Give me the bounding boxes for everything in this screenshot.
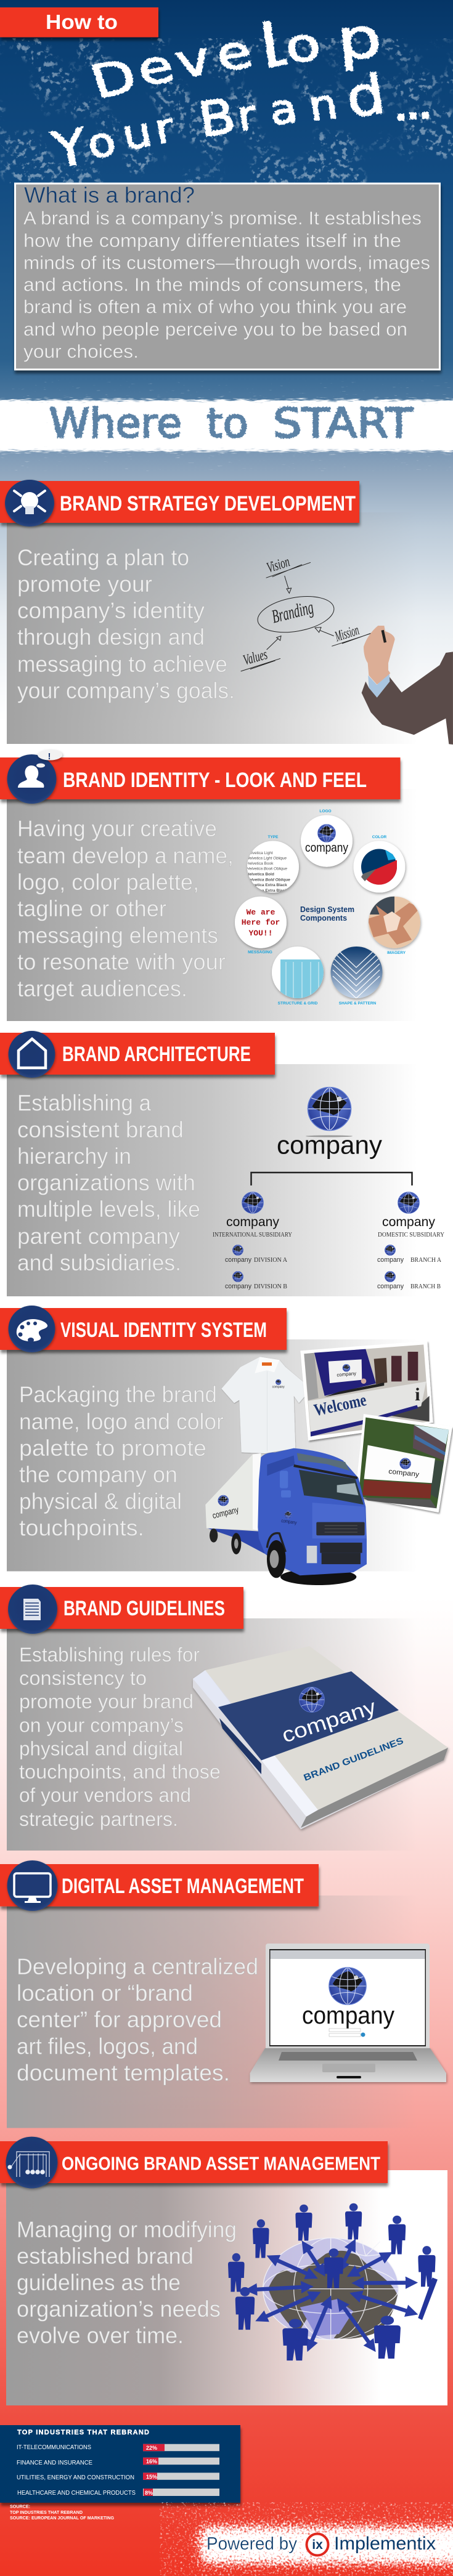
source note xyxy=(10,2505,115,2521)
text: guidelines description: physical and digital xyxy=(19,1738,183,1760)
circle: messaging: YOU!! xyxy=(248,929,273,938)
row: finance and insurance: FINANCE AND INSURANCE xyxy=(17,2460,92,2466)
text: brand definition: and actions. In the minds of consumers, the xyxy=(23,274,401,296)
circle: type: Helvetica Light xyxy=(247,851,273,855)
sketch: branding diagram: Branding xyxy=(269,597,316,627)
text: architecture description: parent company xyxy=(17,1224,180,1249)
banner: where to start xyxy=(0,400,453,451)
heading bar: BRAND ARCHITECTURE xyxy=(62,1043,251,1066)
panel: brand architecture xyxy=(0,1031,453,1296)
footer: powered by implementix xyxy=(206,2534,436,2556)
heading bar: BRAND IDENTITY - LOOK AND FEEL xyxy=(63,769,367,792)
text: architecture description: organizations with xyxy=(17,1170,195,1195)
label: design system components: Design System xyxy=(300,905,354,914)
source note: SOURCE: xyxy=(10,2505,30,2509)
illustration: people around a globe xyxy=(228,2203,438,2360)
text: identity description: target audiences. xyxy=(17,976,187,1001)
text: architecture description: Establishing a xyxy=(17,1090,151,1116)
domestic subsidiary xyxy=(378,1192,444,1238)
sketch: branding diagram: Vision xyxy=(265,554,292,576)
photo: company sign xyxy=(355,1414,452,1512)
circle: messaging: We are xyxy=(247,908,275,917)
panel: digital asset management xyxy=(0,1860,453,2128)
text: architecture description: multiple levels, like xyxy=(17,1197,200,1222)
title: Develop Your Brand: D xyxy=(84,49,143,109)
illustration: shirt xyxy=(221,1357,311,1453)
heading bar xyxy=(0,481,359,523)
text: ongoing description: evolve over time. xyxy=(17,2323,184,2348)
circle: messaging xyxy=(235,897,287,955)
circle: type: Helvetica Book xyxy=(247,862,274,866)
circle: type: Helvetica Bold xyxy=(247,873,274,877)
icon: palette xyxy=(9,1306,55,1352)
text: digital asset description: document templates. xyxy=(17,2061,230,2086)
heading bar xyxy=(0,1864,319,1907)
banner: where to start: Where xyxy=(49,400,182,447)
domestic subsidiary: DOMESTIC SUBSIDIARY xyxy=(378,1231,444,1238)
panel: brand identity xyxy=(0,750,453,1021)
connector xyxy=(251,1173,412,1185)
illustration: shirt: company xyxy=(272,1385,285,1389)
icon: lightbulb xyxy=(5,480,54,527)
text: architecture description xyxy=(17,1090,200,1275)
icon: person with thought bubble: ! xyxy=(48,751,51,762)
text: strategy description: messaging to achieve xyxy=(17,652,227,677)
footer: powered by implementix: Implementix xyxy=(334,2534,436,2554)
branches: company xyxy=(377,1283,404,1290)
text: visual identity description: touchpoints. xyxy=(19,1515,144,1541)
title: Develop Your Brand: Y xyxy=(47,117,92,179)
text: visual identity description: palette to promote xyxy=(19,1435,206,1461)
row: utilities energy and construction: 15% xyxy=(146,2474,157,2480)
text: digital asset description: location or “brand xyxy=(17,1980,193,2006)
icon: monitor xyxy=(7,1860,58,1911)
heading bar xyxy=(0,1033,275,1075)
icon: person with thought bubble xyxy=(7,750,62,804)
circle: structure and grid xyxy=(272,947,324,1006)
circle: messaging: Here for xyxy=(242,918,280,927)
branches: BRANCH B xyxy=(410,1283,441,1290)
illustration: guidelines book: company xyxy=(279,1695,379,1748)
text: digital asset description: Developing a centralized xyxy=(17,1954,258,1979)
sketch: branding diagram xyxy=(241,554,381,671)
circle: logo: LOGO xyxy=(319,809,332,814)
row: utilities energy and construction xyxy=(17,2473,219,2481)
circle: color: COLOR xyxy=(372,835,387,839)
diagram: design system components xyxy=(235,809,420,1006)
logo: ix mark xyxy=(307,2534,328,2556)
text: brand definition: and who people perceive you to be based on xyxy=(23,318,407,340)
heading bar xyxy=(0,757,401,799)
panel: visual identity system xyxy=(0,1306,453,1585)
row: finance and insurance: 16% xyxy=(146,2458,157,2465)
text: architecture description: and subsidiaries. xyxy=(17,1250,181,1275)
text: digital asset description: art files, logos, and xyxy=(17,2033,198,2059)
text: strategy description: Creating a plan to xyxy=(17,545,189,570)
heading bar: BRAND GUIDELINES xyxy=(63,1597,225,1620)
branches xyxy=(377,1245,441,1290)
banner: where to start: START xyxy=(273,400,414,447)
title: Develop Your Brand: our xyxy=(83,104,178,169)
illustration: hand and sleeve xyxy=(362,626,453,745)
title: Develop Your Brand: o xyxy=(281,17,325,73)
icon: newton's cradle xyxy=(6,2137,58,2189)
illustration: truck xyxy=(205,1448,367,1585)
heading bar: DIGITAL ASSET MANAGEMENT xyxy=(62,1875,304,1898)
sketch: branding diagram: Values xyxy=(242,647,269,669)
panel: brand guidelines xyxy=(0,1585,453,1851)
circle: type: Helvetica Extra Black xyxy=(247,889,287,893)
heading bar: ONGOING BRAND ASSET MANAGEMENT xyxy=(62,2153,380,2174)
text: guidelines description: on your company’s xyxy=(19,1714,184,1737)
footer: powered by implementix: Powered by xyxy=(206,2534,297,2554)
row: it telecommunications xyxy=(17,2444,219,2451)
text: visual identity description xyxy=(19,1382,224,1541)
org chart xyxy=(213,1088,444,1290)
header tag: How to xyxy=(0,7,158,37)
text: visual identity description: physical & digital xyxy=(19,1489,182,1514)
heading bar: BRAND STRATEGY DEVELOPMENT xyxy=(60,492,356,515)
panel: brand strategy development xyxy=(0,480,453,745)
row: healthcare and chemical products xyxy=(17,2489,219,2497)
icon: house xyxy=(9,1031,55,1078)
circle: messaging: MESSAGING xyxy=(248,950,272,955)
circle: type: Helvetica Bold Oblique xyxy=(247,878,290,882)
photo: welcome desk: company xyxy=(337,1371,356,1378)
branches: company xyxy=(377,1256,404,1264)
heading bar xyxy=(0,2141,388,2183)
text: ongoing description: established brand xyxy=(17,2243,194,2269)
chalk smudges xyxy=(0,38,453,184)
text: ongoing description xyxy=(17,2217,237,2348)
title: Develop Your Brand: ... xyxy=(393,75,434,132)
text: ongoing description: organization’s needs xyxy=(17,2296,221,2322)
text: guidelines description: strategic partners. xyxy=(19,1808,178,1830)
photo: company sign: company xyxy=(388,1468,420,1479)
divisions: company xyxy=(225,1256,251,1264)
text: brand definition: A brand is a company’s promise. It establishes xyxy=(23,207,422,229)
photo: welcome desk: Welcome xyxy=(312,1391,368,1420)
illustration: truck: company xyxy=(211,1504,240,1520)
photo: welcome desk xyxy=(300,1341,433,1440)
text: strategy description xyxy=(17,545,235,703)
text: brand definition: brand is often a mix of who you think you are xyxy=(23,296,407,318)
circle: type: Helvetica Book Oblique xyxy=(247,867,287,871)
icon: document xyxy=(8,1585,57,1634)
illustration: laptop xyxy=(250,1944,446,2082)
text: identity description: Having your creative xyxy=(17,816,217,841)
row: healthcare and chemical products: 8% xyxy=(145,2490,153,2496)
text: brand definition: how the company differentiates itself in the xyxy=(23,230,401,251)
text: strategy description: your company’s goals. xyxy=(17,678,235,703)
sketch: branding diagram: Mission xyxy=(333,622,361,645)
illustration: truck: company xyxy=(281,1518,297,1525)
heading bar: VISUAL IDENTITY SYSTEM xyxy=(60,1318,267,1342)
heading bar xyxy=(0,1587,243,1629)
text: ongoing description: guidelines as the xyxy=(17,2270,181,2295)
parent company logo: company xyxy=(277,1131,382,1159)
heading bar xyxy=(0,1308,287,1350)
text: guidelines description: consistency to xyxy=(19,1667,147,1689)
circle: type: TYPE xyxy=(268,835,279,839)
international subsidiary xyxy=(213,1192,292,1238)
circle: imagery xyxy=(367,896,420,955)
text: brand definition: minds of its customers—through words, images xyxy=(23,252,430,273)
divisions: company xyxy=(225,1283,251,1290)
text: guidelines description xyxy=(19,1644,221,1830)
text: identity description: messaging elements xyxy=(17,923,218,948)
text: identity description: team develop a name, xyxy=(17,843,234,868)
heading: what is a brand: What is a brand? xyxy=(24,182,195,208)
text: visual identity description: Packaging the brand xyxy=(19,1382,217,1407)
label: design system components xyxy=(300,905,354,923)
text: guidelines description: of your vendors and xyxy=(19,1784,191,1806)
title: Develop Your Brand: B xyxy=(195,89,239,148)
international subsidiary: INTERNATIONAL SUBSIDIARY xyxy=(213,1231,292,1238)
domestic subsidiary: company xyxy=(382,1215,435,1229)
text: identity description: to resonate with your xyxy=(17,950,226,975)
title: Develop Your Brand: eve xyxy=(130,24,258,97)
text: guidelines description: promote your brand xyxy=(19,1690,194,1713)
title: Develop Your Brand xyxy=(47,6,434,179)
row: it telecommunications: IT-TELECOMMUNICATIONS xyxy=(17,2444,91,2451)
panel: what is a brand xyxy=(15,182,440,369)
text: ongoing description: Managing or modifying xyxy=(17,2217,237,2242)
title: Develop Your Brand: d xyxy=(342,62,390,130)
title: Develop Your Brand: ran xyxy=(234,81,341,140)
title: Develop Your Brand: p xyxy=(335,6,384,73)
parent company logo xyxy=(277,1088,382,1159)
text: guidelines description: Establishing rules for xyxy=(19,1644,200,1666)
branches: BRANCH A xyxy=(410,1256,441,1264)
banner: where to start: to xyxy=(206,400,248,447)
row: finance and insurance xyxy=(17,2458,219,2466)
photo: welcome desk: i xyxy=(415,1384,420,1405)
illustration: guidelines book xyxy=(193,1646,448,1829)
label: design system components: Components xyxy=(300,914,347,923)
illustration: guidelines book: BRAND GUIDELINES xyxy=(302,1735,405,1783)
divisions: DIVISION B xyxy=(254,1283,287,1290)
divisions: DIVISION A xyxy=(254,1256,287,1264)
circle: type: Helvetica Light Oblique xyxy=(247,856,287,861)
circle: type: Helvetica Extra Black xyxy=(247,883,287,887)
text: identity description: tagline or other xyxy=(17,896,166,921)
text: brand definition xyxy=(23,207,430,362)
circle: logo: company xyxy=(305,841,348,855)
logo: ix mark: ix xyxy=(312,2538,323,2552)
divisions xyxy=(225,1245,287,1290)
title: Develop Your Brand: l xyxy=(256,11,284,79)
text: strategy description: promote your xyxy=(17,571,152,597)
row: healthcare and chemical products: HEALTHCARE AND CHEMICAL PRODUCTS xyxy=(17,2490,136,2497)
circle: imagery: IMAGERY xyxy=(387,951,406,955)
source note: TOP INDUSTRIES THAT REBRAND xyxy=(10,2511,83,2515)
circle: shape and pattern: SHAPE & PATTERN xyxy=(339,1001,377,1006)
text: brand definition: your choices. xyxy=(23,341,139,362)
panel: ongoing brand asset management xyxy=(0,2137,447,2405)
text: strategy description: through design and xyxy=(17,624,205,650)
text: identity description xyxy=(17,816,234,1001)
circle: logo xyxy=(301,809,353,867)
header tag: How to: How to xyxy=(46,10,118,33)
text: guidelines description: touchpoints, and those xyxy=(19,1761,221,1783)
text: strategy description: company’s identity xyxy=(17,598,205,623)
illustration: laptop: company xyxy=(302,2002,394,2029)
circle: color xyxy=(354,835,406,893)
text: visual identity description: name, logo and color xyxy=(19,1409,224,1434)
circle: structure and grid: STRUCTURE & GRID xyxy=(278,1001,318,1006)
circle: type xyxy=(247,835,299,893)
footer chalk band xyxy=(200,2527,453,2563)
text: digital asset description xyxy=(17,1954,258,2086)
text: identity description: logo, color palette, xyxy=(17,870,199,895)
source note: SOURCE: EUROPEAN JOURNAL OF MARKETING xyxy=(10,2516,115,2521)
row: it telecommunications: 22% xyxy=(146,2445,157,2451)
text: architecture description: consistent brand xyxy=(17,1117,184,1142)
row: utilities energy and construction: UTILITIES, ENERGY AND CONSTRUCTION xyxy=(17,2474,134,2481)
chart: top industries that rebrand xyxy=(0,2425,240,2503)
circle: shape and pattern xyxy=(330,945,382,1006)
text: visual identity description: the company on xyxy=(19,1462,178,1487)
chart title: TOP INDUSTRIES THAT REBRAND xyxy=(17,2429,149,2436)
text: digital asset description: center” for approved xyxy=(17,2007,222,2032)
international subsidiary: company xyxy=(226,1215,279,1229)
text: architecture description: hierarchy in xyxy=(17,1144,131,1169)
